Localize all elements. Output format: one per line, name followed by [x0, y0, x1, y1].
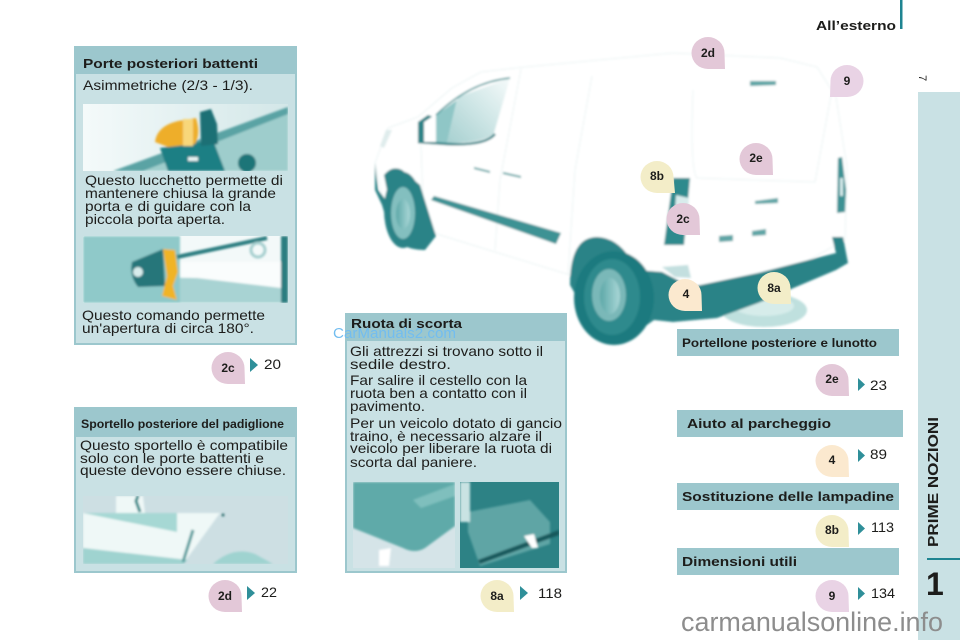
chapter number: 1 [926, 566, 944, 602]
text: asimmetriche: Asimmetriche (2/3 - 1/3). [83, 77, 253, 93]
heading: sportello posteriore: Sportello posteriore del padiglione [81, 417, 284, 431]
text: door control description [82, 307, 265, 336]
page title: All’esterno [816, 18, 896, 33]
reference: 2d page 22: 22 [261, 584, 277, 600]
watermark: carmanuals2: CarManuals2.com [333, 325, 456, 342]
reference: 8b page 113: 8b [825, 523, 839, 537]
pin: 9 on van [830, 65, 864, 97]
text: sportello description: solo con le porte battenti e [80, 450, 264, 466]
text: padlock description: piccola porta aperta. [85, 211, 225, 227]
photo: roof hatch [83, 496, 272, 564]
sidebar divider [927, 558, 960, 560]
bar: aiuto al parcheggio [677, 410, 903, 437]
pin: 2d on van: 2d [701, 46, 715, 60]
panel: ruota di scorta [345, 313, 567, 572]
pin: 8b on van [641, 161, 675, 193]
text: door control description: un'apertura di circa 180°. [82, 320, 254, 336]
pin: 8a on van: 8a [767, 281, 781, 295]
reference: 2e page 23 [816, 364, 887, 396]
reference: 2d page 22 [208, 580, 277, 612]
pin: 2e on van [740, 143, 773, 175]
reference: 8a page 118: 118 [538, 585, 562, 601]
bar: aiuto al parcheggio: Aiuto al parcheggio [687, 416, 831, 431]
page number: 7 [916, 75, 928, 81]
photo: door control [83, 236, 288, 303]
reference: 8a page 118: 8a [490, 589, 504, 603]
text: spare wheel instructions: veicolo per liberare la ruota di [350, 440, 552, 456]
watermark: carmanualsonline: carmanualsonline.info [681, 607, 943, 637]
pin: 2d on van [692, 37, 725, 69]
text: spare wheel instructions: traino, è necessario alzare il [350, 428, 542, 444]
reference: 2c page 20: 2c [221, 361, 235, 375]
text: sportello description: queste devono essere chiuse. [80, 462, 286, 478]
text: door control description: Questo comando permette [82, 307, 265, 323]
bar: dimensioni utili: Dimensioni utili [682, 554, 797, 569]
reference: 9 page 134: 134 [871, 585, 895, 601]
text: sportello description [80, 437, 288, 478]
pin: 8b on van: 8b [650, 169, 664, 183]
text: spare wheel instructions: sedile destro. [350, 356, 451, 372]
text: padlock description: porta e di guidare con la [85, 198, 251, 214]
text: padlock description: mantenere chiusa la grande [85, 185, 276, 201]
text: spare wheel instructions: Gli attrezzi si trovano sotto il [350, 343, 543, 359]
pin: 2c on van: 2c [676, 212, 690, 226]
bar: dimensioni utili [677, 548, 899, 575]
van illustration [375, 53, 848, 345]
pin: 8a on van [758, 272, 791, 304]
pin: 4 on van: 4 [683, 287, 690, 301]
panel: sportello posteriore del padiglione [74, 407, 297, 572]
text: spare wheel instructions: ruota ben a contatto con il [350, 385, 527, 401]
pin: 2c on van [666, 203, 700, 235]
text: spare wheel instructions [350, 343, 562, 470]
text: spare wheel instructions: pavimento. [350, 398, 425, 414]
sidebar label: prime nozioni: PRIME NOZIONI [925, 417, 942, 547]
text: spare wheel instructions: Per un veicolo dotato di gancio [350, 415, 562, 431]
pin: 2e on van: 2e [749, 151, 763, 165]
reference: 8a page 118 [481, 580, 562, 612]
photo: spare wheel cradle with arrow [460, 482, 559, 568]
reference: 2e page 23: 23 [870, 377, 887, 393]
reference: 4 page 89: 89 [870, 446, 887, 462]
photo: padlock latch [83, 104, 288, 171]
heading: porte posteriori battenti: Porte posteriori battenti [83, 56, 258, 71]
text: sportello description: Questo sportello è compatibile [80, 437, 288, 453]
text: padlock description [85, 172, 283, 227]
header accent line [900, 0, 902, 29]
pin: 4 on van [668, 279, 702, 311]
bar: sostituzione delle lampadine [677, 483, 899, 510]
pin: 9 on van: 9 [844, 74, 851, 88]
bar: sostituzione delle lampadine: Sostituzione delle lampadine [682, 489, 894, 504]
reference: 4 page 89 [816, 445, 887, 477]
heading: ruota di scorta: Ruota di scorta [351, 316, 463, 331]
sidebar band [918, 92, 960, 640]
reference: 2c page 20 [212, 352, 281, 384]
bar: portellone posteriore e lunotto: Portellone posteriore e lunotto [682, 336, 877, 350]
reference: 9 page 134: 9 [829, 589, 836, 603]
panel: porte posteriori battenti [74, 46, 297, 344]
reference: 9 page 134 [816, 580, 895, 612]
text: spare wheel instructions: Far salire il cestello con la [350, 372, 527, 388]
reference: 2e page 23: 2e [825, 372, 839, 386]
reference: 2d page 22: 2d [218, 589, 232, 603]
text: spare wheel instructions: scorta dal paniere. [350, 454, 477, 470]
reference: 8b page 113 [816, 515, 894, 547]
reference: 2c page 20: 20 [264, 356, 281, 372]
photo: seat with arrow [353, 482, 455, 568]
reference: 8b page 113: 113 [871, 519, 894, 535]
bar: portellone posteriore e lunotto [677, 329, 899, 356]
reference: 4 page 89: 4 [829, 453, 836, 467]
text: padlock description: Questo lucchetto permette di [85, 172, 283, 188]
